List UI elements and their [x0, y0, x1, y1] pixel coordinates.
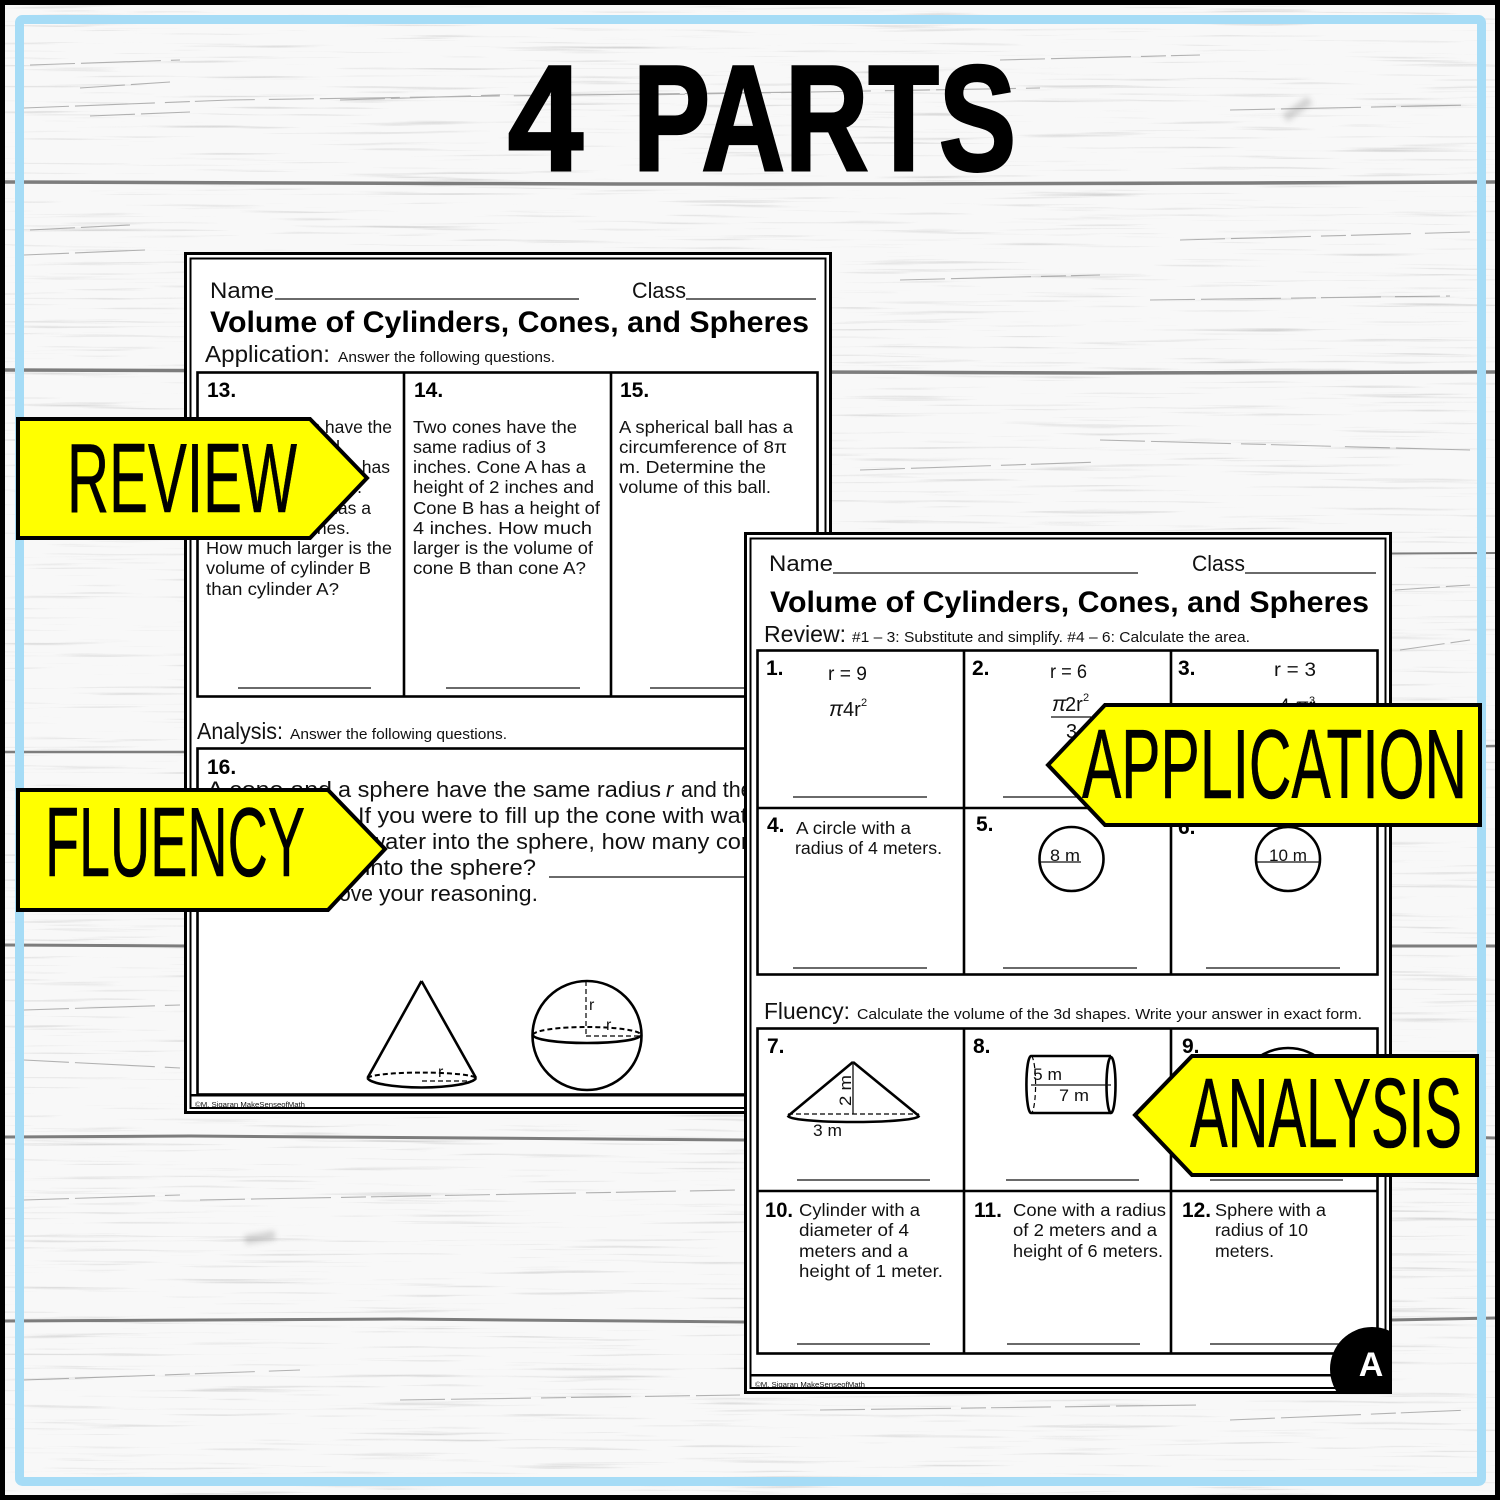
fluency question table: diameter of 4 [799, 1220, 909, 1240]
copyright: ©M. Sigaran MakeSenseofMath [195, 1101, 305, 1109]
application question table: larger is the volume of [413, 538, 593, 558]
application question table: volume of this ball. [619, 477, 771, 497]
icon: cone 2 m by 3 m: 3 m [813, 1121, 842, 1140]
review question table: radius of 4 meters. [795, 838, 942, 858]
fluency question table: Cylinder with a [799, 1200, 920, 1220]
fluency heading [764, 998, 1362, 1024]
tag: fluency [18, 787, 385, 910]
review question table: 4 [1279, 696, 1290, 717]
application question table: m. Determine the [619, 457, 766, 477]
icon: sphere: r [606, 1017, 612, 1034]
icon: sphere: r [589, 997, 595, 1014]
analysis question: and the same [681, 777, 811, 802]
review question table: 4r [843, 699, 861, 721]
worksheet header: Name [769, 551, 833, 576]
application question table: height of 2 inches and [413, 477, 594, 497]
fluency question table: meters. [1215, 1241, 1274, 1261]
worksheet header: Review: [764, 621, 846, 647]
fluency question table: 11. [974, 1199, 1002, 1222]
fluency question table: height of 6 meters. [1013, 1241, 1163, 1261]
review question table: r = 9 [828, 664, 867, 685]
application question table: volume of cylinder B [206, 558, 371, 578]
application question table [198, 372, 818, 697]
fluency question table: 12. [1182, 1199, 1211, 1222]
worksheet header: Class [632, 278, 686, 303]
fluency question table: 9. [1182, 1035, 1200, 1058]
analysis question: A cone and [207, 777, 332, 802]
application question table: inches. [295, 518, 350, 538]
analysis question: r [666, 777, 675, 802]
fluency question table: height of 1 meter. [799, 1261, 943, 1281]
title: 4 [508, 34, 583, 202]
icon: sphere behind analysis tag [1236, 1048, 1340, 1152]
review question table: A circle with a [796, 818, 911, 838]
analysis question: Answer the following questions. [290, 726, 507, 743]
worksheet header: Application: [205, 341, 330, 367]
panel: worksheet page 2 (application and analysis) [186, 254, 830, 1112]
analysis question: Analysis: [197, 718, 283, 744]
analysis question: water [367, 829, 426, 854]
icon: cylinder 5 m by 7 m [1026, 1056, 1116, 1113]
icon: cone: r [438, 1064, 444, 1081]
application question table: 14. [414, 379, 443, 402]
analysis question: into the sphere, how many cones [432, 829, 779, 854]
fluency question table: radius of 10 [1215, 1220, 1308, 1240]
application question table: inches. Cone A has a [413, 457, 586, 477]
fluency question table: Cone with a radius [1013, 1200, 1166, 1220]
analysis question: 16. [207, 756, 236, 779]
application question table: Cone B has a height of [413, 498, 600, 518]
analysis question: Prove [318, 881, 373, 906]
icon: cylinder 5 m by 7 m: 7 m [1059, 1086, 1089, 1105]
fluency question table: meters and a [799, 1241, 908, 1261]
application question table: Cylinder B has a [243, 498, 371, 518]
application question table: Cylinder A has [278, 457, 390, 477]
review question table [757, 650, 1378, 975]
analysis question [197, 718, 818, 1094]
worksheet header: Class [1192, 551, 1245, 576]
application question table: Two cones have the [413, 417, 577, 437]
tag: fluency: FLUENCY [45, 787, 305, 897]
fluency heading: Calculate the volume of the 3d shapes. Write your answer in exact form. [857, 1006, 1362, 1023]
icon: cone 2 m by 3 m: 2 m [836, 1075, 855, 1106]
analysis question: a sphere have the same radius [338, 777, 661, 802]
application question table: circumference of 8π [619, 437, 787, 457]
fluency question table: 8. [973, 1035, 991, 1058]
icon: circle 8 m: 8 m [1050, 846, 1080, 865]
icon: circle 10 m: 10 m [1269, 846, 1307, 865]
review question table: 3 [1309, 695, 1315, 707]
icon: circle 8 m [1040, 827, 1104, 891]
review question table: 6. [1178, 816, 1196, 839]
fluency question table: 10. [765, 1199, 793, 1222]
worksheet header [205, 278, 816, 367]
icon: cylinder 5 m by 7 m: 5 m [1033, 1065, 1062, 1084]
icon: cone [368, 981, 476, 1087]
review question table: π [829, 698, 844, 721]
fluency question table: 7. [767, 1035, 785, 1058]
review question table: 1. [766, 657, 784, 680]
fluency question table: Sphere with a [1215, 1200, 1326, 1220]
review question table: 2 [1083, 692, 1089, 704]
application question table: cone B than cone A? [413, 558, 586, 578]
review question table: 5. [976, 813, 994, 836]
review question table: 2r [1065, 694, 1083, 716]
analysis question: If you were to fill up the cone with water [358, 803, 768, 828]
application question table: inches. [307, 477, 362, 497]
icon: sphere [532, 981, 642, 1090]
application question table: 4 inches. How much [413, 518, 592, 538]
review question table: 2. [972, 657, 990, 680]
analysis question: your reasoning. [379, 881, 538, 906]
application question table: How much larger is the [206, 538, 392, 558]
application question table: 13. [207, 379, 236, 402]
analysis question: into the sphere? [365, 855, 536, 880]
review question table: 3 [1066, 721, 1077, 743]
review question table: 4. [767, 814, 785, 837]
review question table: πr [1296, 696, 1316, 717]
fluency question table: of 2 meters and a [1013, 1220, 1157, 1240]
review question table: 3. [1178, 657, 1196, 680]
review question table: π [1052, 693, 1067, 716]
worksheet header [764, 551, 1376, 647]
review question table: 2 [861, 697, 867, 709]
badge: version A [1330, 1327, 1389, 1391]
title: PARTS [633, 34, 1016, 202]
review question table: r = 3 [1274, 660, 1316, 681]
worksheet header: Volume of Cylinders, Cones, and Spheres [210, 306, 809, 339]
application question table: same radius of 3 [413, 437, 546, 457]
application question table: same radius and [211, 437, 340, 457]
copyright: ©M. Sigaran MakeSenseofMath [755, 1381, 865, 1389]
application question table: 15. [620, 379, 649, 402]
review question table: r = 6 [1050, 662, 1087, 683]
application question table: A spherical ball has a [619, 417, 793, 437]
application question table: than cylinder A? [206, 579, 339, 599]
tag: review: REVIEW [67, 423, 297, 533]
worksheet header: #1 – 3: Substitute and simplify. #4 – 6: Calculate the area. [852, 629, 1250, 646]
worksheet header: Name [210, 278, 274, 303]
title [508, 34, 1016, 202]
application question table: Two cylinders have the [214, 417, 392, 437]
badge: version A: A [1359, 1346, 1383, 1384]
fluency heading: Fluency: [764, 998, 850, 1024]
icon: circle 10 m [1256, 827, 1320, 891]
worksheet header: Volume of Cylinders, Cones, and Spheres [770, 586, 1369, 619]
fluency question table [757, 1028, 1378, 1354]
worksheet header: Answer the following questions. [338, 349, 555, 366]
tag: review [18, 419, 367, 538]
icon: cone 2 m by 3 m [788, 1062, 919, 1140]
panel: worksheet page 1 (review and fluency) [746, 534, 1414, 1411]
